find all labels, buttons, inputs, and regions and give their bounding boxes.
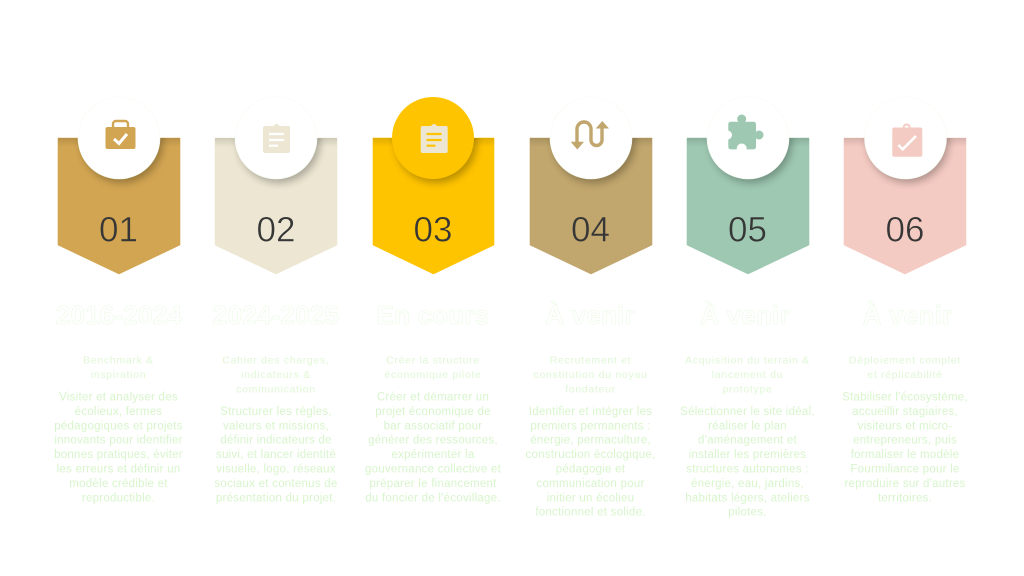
description 06: entrepreneurs, puis: [853, 435, 957, 447]
description 02: définir indicateurs de: [220, 435, 332, 447]
subtitle 02: indicateurs &: [241, 369, 311, 381]
description 06: formaliser le modèle: [851, 449, 959, 461]
date 02: 2024-2025: [213, 300, 339, 330]
subtitle 04: Recrutement et: [550, 354, 631, 366]
date 04: À venir: [545, 300, 635, 330]
description 06: Fourmiliance pour le: [850, 464, 960, 476]
description 01: les erreurs et définir un: [57, 464, 180, 476]
number 04: 04: [571, 210, 610, 250]
banner 02: [215, 138, 337, 274]
banner 06: [844, 138, 966, 274]
description 03: générer des ressources,: [368, 435, 498, 447]
date 01: 2016-2024: [56, 300, 182, 330]
banner shadow 05: [687, 138, 809, 186]
description 04: communication pour: [536, 478, 645, 490]
description 03: projet économique de: [375, 406, 491, 418]
description 05: structures autonomes :: [686, 464, 809, 476]
description 03: bar associatif pour: [384, 420, 482, 432]
icon: up and down arrows: [571, 121, 609, 150]
circle 02: [235, 97, 317, 179]
circle 05: [707, 97, 789, 179]
subtitle 01: Benchmark &: [83, 354, 154, 366]
subtitle 06: et réplicabilité: [867, 369, 943, 381]
banner shadow 04: [530, 138, 652, 186]
subtitle 05: Acquisition du terrain &: [685, 354, 810, 366]
banner 03: [373, 138, 494, 274]
icon: briefcase with check: [106, 121, 136, 149]
banner shadow 03: [373, 138, 494, 187]
number 06: 06: [886, 210, 924, 250]
description 01: pédagogiques et projets: [54, 420, 183, 432]
date 05: À venir: [700, 300, 790, 330]
description 03: gouvernance collective et: [365, 464, 502, 476]
description 05: réaliser le plan: [708, 420, 787, 432]
description 05: Sélectionner le site idéal,: [680, 406, 815, 418]
description 01: bonnes pratiques, éviter: [54, 449, 183, 461]
description 01: innovants pour identifier: [54, 435, 183, 447]
description 06: accueillir stagiaires,: [852, 406, 958, 418]
panel: step 06: [842, 97, 968, 504]
icon: clipboard: [263, 124, 290, 153]
description 02: visuelle, logo, réseaux: [216, 464, 336, 476]
description 02: suivi, et lancer identité: [216, 449, 336, 461]
circle 06: [864, 97, 946, 179]
icon: puzzle piece: [723, 114, 764, 154]
description 03: préparer le financement: [369, 478, 497, 490]
description 01: Visiter et analyser des: [59, 392, 178, 404]
description 05: d'aménagement et: [698, 435, 797, 447]
description 06: visiteurs et micro-: [858, 420, 952, 432]
subtitle 03: Créer la structure: [386, 354, 480, 366]
description 05: installer les premières: [689, 449, 806, 461]
circle 04: [550, 97, 632, 179]
description 05: pilotes.: [728, 507, 767, 519]
description 02: Structurer les règles,: [220, 406, 332, 418]
date 03: En cours: [377, 300, 489, 330]
icon: clipboard with check: [892, 124, 922, 157]
subtitle 03: économique pilote: [384, 369, 482, 381]
panel: step 03: [365, 97, 502, 504]
subtitle 04: fondateur: [565, 384, 616, 396]
subtitle 04: constitution du noyau: [534, 369, 647, 381]
description 04: fonctionnel et solide.: [535, 507, 646, 519]
description 02: valeurs et missions,: [223, 420, 329, 432]
panel: step 01: [54, 97, 183, 504]
description 04: initier un écolieu: [547, 492, 634, 504]
description 06: Stabiliser l'écosystème,: [842, 392, 968, 404]
description 03: expérimenter la: [391, 449, 475, 461]
description 01: modèle crédible et: [69, 478, 168, 490]
description 03: du foncier de l'écovillage.: [365, 492, 501, 504]
number 05: 05: [728, 210, 767, 250]
banner 05: [687, 138, 809, 274]
circle 01: [78, 97, 160, 179]
subtitle 05: prototype: [722, 384, 773, 396]
description 02: sociaux et contenus de: [214, 478, 338, 490]
subtitle 02: Cahier des charges,: [222, 354, 330, 366]
description 06: territoires.: [878, 492, 932, 504]
description 03: Créer et démarrer un: [377, 392, 489, 404]
description 04: pédagogie et: [556, 464, 626, 476]
subtitle 02: communication: [236, 384, 316, 396]
description 04: construction écologique,: [525, 449, 656, 461]
description 01: reproductible.: [82, 492, 155, 504]
banner shadow 06: [844, 138, 966, 187]
banner 04: [530, 138, 652, 274]
number 02: 02: [257, 210, 295, 250]
description 05: habitats légers, ateliers: [685, 492, 810, 504]
circle 03: [392, 97, 474, 179]
banner shadow 02: [215, 138, 337, 187]
icon: clipboard on yellow: [421, 124, 448, 153]
description 04: énergie, permaculture,: [530, 435, 651, 447]
description 02: présentation du projet.: [216, 492, 336, 504]
description 04: Identifier et intégrer les: [529, 406, 652, 418]
subtitle 06: Déploiement complet: [849, 354, 961, 366]
subtitle 05: lancement du: [712, 369, 783, 381]
number 01: 01: [99, 210, 138, 250]
number 03: 03: [414, 210, 452, 250]
banner shadow 01: [58, 138, 180, 187]
description 05: énergie, eau, jardins,: [691, 478, 804, 490]
description 01: écolieux, fermes: [75, 406, 162, 418]
panel: step 04: [525, 97, 656, 519]
panel: step 05: [680, 97, 815, 519]
banner 01: [58, 138, 180, 274]
panel: step 02: [213, 97, 339, 504]
description 06: reproduire sur d'autres: [844, 478, 966, 490]
subtitle 01: inspiration: [91, 369, 146, 381]
date 06: À venir: [863, 300, 952, 330]
description 04: premiers permanents :: [530, 420, 651, 432]
